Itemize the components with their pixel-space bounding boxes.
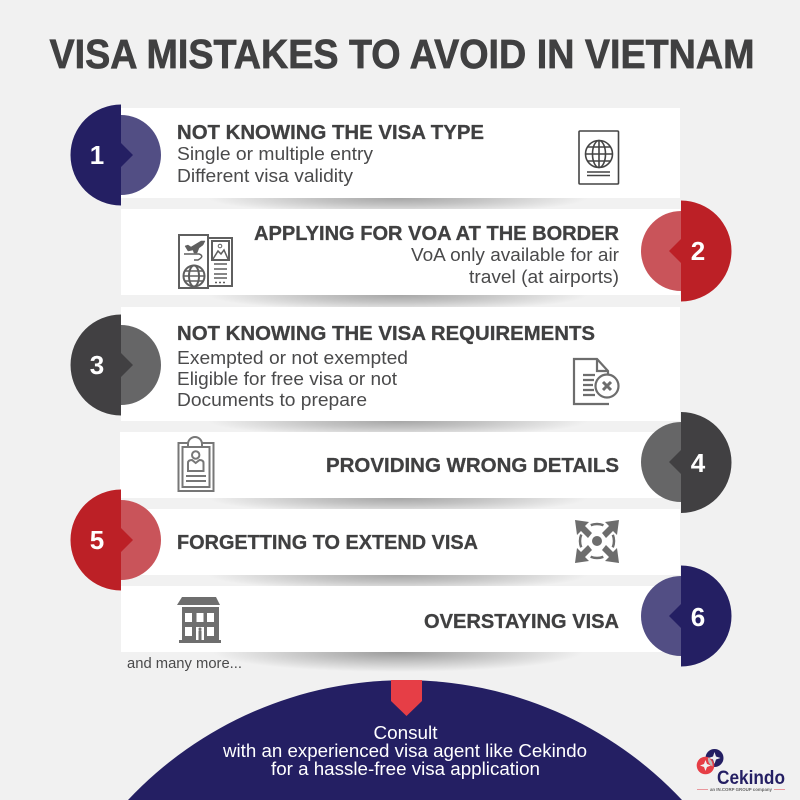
badge 1: 1 bbox=[90, 140, 104, 170]
panel: mistake 6 bbox=[121, 586, 680, 652]
icon: building bbox=[177, 597, 221, 643]
text: mistake 1 details bbox=[177, 143, 374, 186]
icon: expanding arrows bbox=[575, 520, 619, 563]
logo: Cekindo bbox=[697, 749, 785, 792]
text: mistake 1 details: Single or multiple entry bbox=[177, 143, 374, 164]
call to action panel bbox=[128, 680, 682, 800]
title: VISA MISTAKES TO AVOID IN VIETNAM bbox=[50, 31, 754, 77]
panel: mistake 3 bbox=[121, 307, 680, 421]
text: call to action: with an experienced visa agent like Cekindo bbox=[222, 740, 587, 761]
text: mistake 3 details: Exempted or not exempted bbox=[177, 347, 408, 368]
badge 6 bbox=[641, 566, 732, 666]
badge 6: 6 bbox=[691, 602, 705, 632]
badge 2: 2 bbox=[691, 236, 705, 266]
icon: rejected document bbox=[574, 359, 618, 404]
heading: mistake 4: PROVIDING WRONG DETAILS bbox=[326, 455, 619, 477]
text: call to action: Consult bbox=[374, 722, 438, 743]
text: call to action bbox=[222, 722, 587, 779]
heading: mistake 3: NOT KNOWING THE VISA REQUIREMENTS bbox=[177, 323, 595, 345]
badge 3: 3 bbox=[90, 350, 104, 380]
badge 4 bbox=[641, 412, 732, 513]
text: mistake 2 details: VoA only available for air bbox=[411, 244, 619, 265]
panel: mistake 4 bbox=[120, 432, 680, 498]
panel: mistake 1 bbox=[121, 108, 680, 198]
heading: mistake 2: APPLYING FOR VOA AT THE BORDER bbox=[254, 223, 620, 245]
text: mistake 2 details bbox=[411, 244, 619, 287]
icon: red pointer bbox=[391, 680, 422, 716]
badge 4: 4 bbox=[691, 448, 706, 478]
icon: clipboard profile bbox=[178, 437, 214, 491]
heading: mistake 5: FORGETTING TO EXTEND VISA bbox=[177, 532, 478, 554]
panel shadows bbox=[208, 182, 588, 672]
text: mistake 3 details: Documents to prepare bbox=[177, 389, 367, 410]
text: mistake 3 details: Eligible for free visa or not bbox=[177, 368, 397, 389]
note: and many more: and many more... bbox=[127, 656, 242, 672]
panel: mistake 2 bbox=[121, 209, 680, 295]
badge 5 bbox=[70, 490, 161, 590]
panel: mistake 5 bbox=[120, 509, 680, 575]
badge 3 bbox=[71, 314, 161, 416]
icon: passport bbox=[579, 131, 618, 184]
badge 1 bbox=[70, 104, 161, 206]
logo: Cekindo: an IN.CORP GROUP company bbox=[710, 787, 772, 792]
badge 5: 5 bbox=[90, 525, 104, 555]
heading: mistake 1: NOT KNOWING THE VISA TYPE bbox=[177, 122, 484, 144]
icon: travel documents bbox=[179, 235, 232, 288]
text: mistake 1 details: Different visa validity bbox=[177, 165, 354, 186]
logo: Cekindo: Cekindo bbox=[717, 767, 785, 789]
badge 2 bbox=[641, 200, 732, 302]
text: mistake 2 details: travel (at airports) bbox=[469, 266, 619, 287]
heading: mistake 6: OVERSTAYING VISA bbox=[424, 611, 619, 633]
text: call to action: for a hassle-free visa application bbox=[271, 758, 540, 779]
text: mistake 3 details bbox=[177, 347, 408, 410]
